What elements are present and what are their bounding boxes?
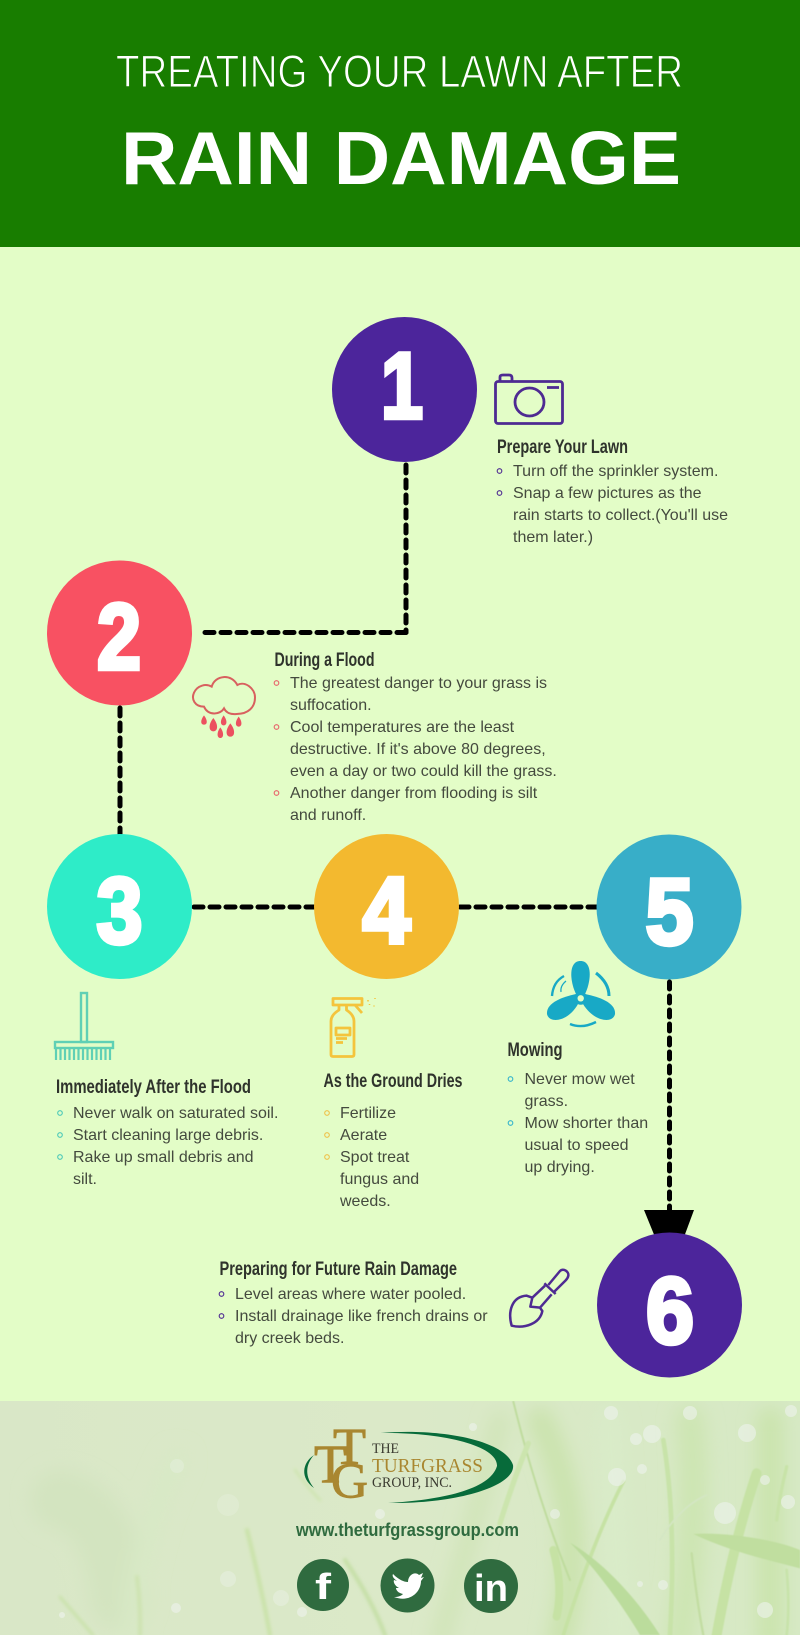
website url: www.theturfgrassgroup.com [295, 1520, 519, 1540]
logo wordmark: THE [372, 1441, 399, 1457]
step 4 circle: 4 [362, 858, 410, 962]
dashed connector path [120, 465, 670, 1212]
step 1 text: Prepare Your Lawn: them later.) [513, 529, 593, 546]
step 2 circle: 2 [97, 584, 141, 689]
icon: camera [496, 375, 562, 424]
step 3 text: Immediately After the Flood: Start cleaning large debris. [73, 1127, 263, 1144]
step 6 text: Preparing for Future Rain Damage [219, 1259, 488, 1347]
step 5 text: Mowing: Mowing [508, 1040, 562, 1061]
step 2 text: During a Flood: During a Flood [274, 650, 374, 671]
step 2 circle [47, 560, 192, 706]
step 1 text: Prepare Your Lawn: Snap a few pictures as the [513, 485, 702, 502]
step 3 text: Immediately After the Flood: Never walk on saturated soil. [73, 1105, 278, 1122]
step 2 text: During a Flood: Cool temperatures are the least [290, 719, 515, 736]
step 5 text: Mowing: Never mow wet [524, 1071, 635, 1088]
step 6 circle: 6 [646, 1258, 694, 1363]
logo monogram: G [331, 1452, 368, 1508]
step 6 text: Preparing for Future Rain Damage: Level areas where water pooled. [235, 1286, 466, 1303]
arrow head into step 6 [644, 1210, 694, 1237]
step 4 text: As the Ground Dries: Aerate [340, 1127, 387, 1144]
icon: linkedin [464, 1559, 518, 1613]
icon: rake [55, 993, 113, 1060]
step 1 text: Prepare Your Lawn: Turn off the sprinkler system. [513, 463, 718, 480]
icon: linkedin: in [474, 1568, 508, 1610]
step 6 text: Preparing for Future Rain Damage: Install drainage like french drains or [235, 1308, 488, 1325]
step 2 text: During a Flood: and runoff. [290, 807, 366, 824]
step 3 circle [47, 834, 192, 979]
step 4 circle [314, 834, 459, 979]
logo: The Turfgrass Group: TURFGRASS [372, 1455, 483, 1477]
icon: facebook: f [315, 1566, 332, 1607]
step 3 circle: 3 [96, 858, 142, 963]
header banner [0, 0, 800, 247]
logo: The Turfgrass Group: GROUP, INC. [372, 1475, 452, 1491]
water droplets [59, 1405, 797, 1618]
icon: spray bottle [331, 998, 375, 1056]
icon: rain cloud [193, 677, 255, 738]
step 4 text: As the Ground Dries: weeds. [339, 1193, 391, 1210]
step 2 text: During a Flood: The greatest danger to your grass is [290, 675, 547, 692]
step 3 text: Immediately After the Flood: Immediately After the Flood [56, 1077, 251, 1098]
step 5 text: Mowing: grass. [524, 1093, 568, 1110]
blurred left-side blades [60, 1470, 385, 1635]
step 4 text: As the Ground Dries: Spot treat [340, 1149, 410, 1166]
step 1 text: Prepare Your Lawn: rain starts to collect.(You'll use [513, 507, 728, 524]
footer grass photo panel [0, 1401, 800, 1635]
logo monogram: T [314, 1434, 347, 1494]
step 5 text: Mowing: Mow shorter than [524, 1115, 648, 1132]
logo: The Turfgrass Group [304, 1419, 513, 1508]
step 2 text: During a Flood: suffocation. [290, 697, 372, 714]
step 2 text: During a Flood [274, 650, 557, 824]
grass blades [500, 1402, 800, 1635]
icon: trowel [510, 1270, 568, 1327]
step 1 circle: 1 [381, 333, 423, 438]
logo swoosh [381, 1432, 513, 1503]
icon: fan [547, 961, 615, 1026]
step 3 text: Immediately After the Flood: silt. [73, 1171, 97, 1188]
step 4 text: As the Ground Dries: fungus and [340, 1171, 419, 1188]
step 5 circle: 5 [646, 859, 694, 964]
step 5 text: Mowing: usual to speed [524, 1137, 629, 1154]
step 4 text: As the Ground Dries: Fertilize [340, 1105, 396, 1122]
step 2 text: During a Flood: destructive. If it's above 80 degrees, [290, 741, 546, 758]
icon: facebook [297, 1559, 349, 1611]
step 4 text: As the Ground Dries [324, 1071, 462, 1210]
step 3 text: Immediately After the Flood [56, 1077, 278, 1188]
logo monogram [314, 1419, 368, 1508]
step 4 text: As the Ground Dries: As the Ground Dries [324, 1071, 462, 1092]
title: first line: TREATING YOUR LAWN AFTER [116, 46, 683, 97]
step 1 text: Prepare Your Lawn [497, 437, 728, 546]
title: second line: RAIN DAMAGE [121, 116, 681, 200]
logo monogram: T [333, 1419, 366, 1476]
step 2 text: During a Flood: even a day or two could kill the grass. [290, 763, 557, 780]
step 6 text: Preparing for Future Rain Damage: Preparing for Future Rain Damage [220, 1259, 457, 1280]
step 5 text: Mowing: up drying. [524, 1159, 595, 1176]
step 1 circle [332, 317, 477, 462]
step 1 text: Prepare Your Lawn: Prepare Your Lawn [497, 437, 628, 458]
step 6 text: Preparing for Future Rain Damage: dry creek beds. [235, 1330, 344, 1347]
icon: twitter [380, 1558, 434, 1612]
step 3 text: Immediately After the Flood: Rake up small debris and [73, 1149, 254, 1166]
step 2 text: During a Flood: Another danger from flooding is silt [290, 785, 538, 802]
step 5 text: Mowing [508, 1040, 648, 1176]
step 5 circle [596, 834, 742, 980]
step 6 circle [597, 1232, 742, 1378]
